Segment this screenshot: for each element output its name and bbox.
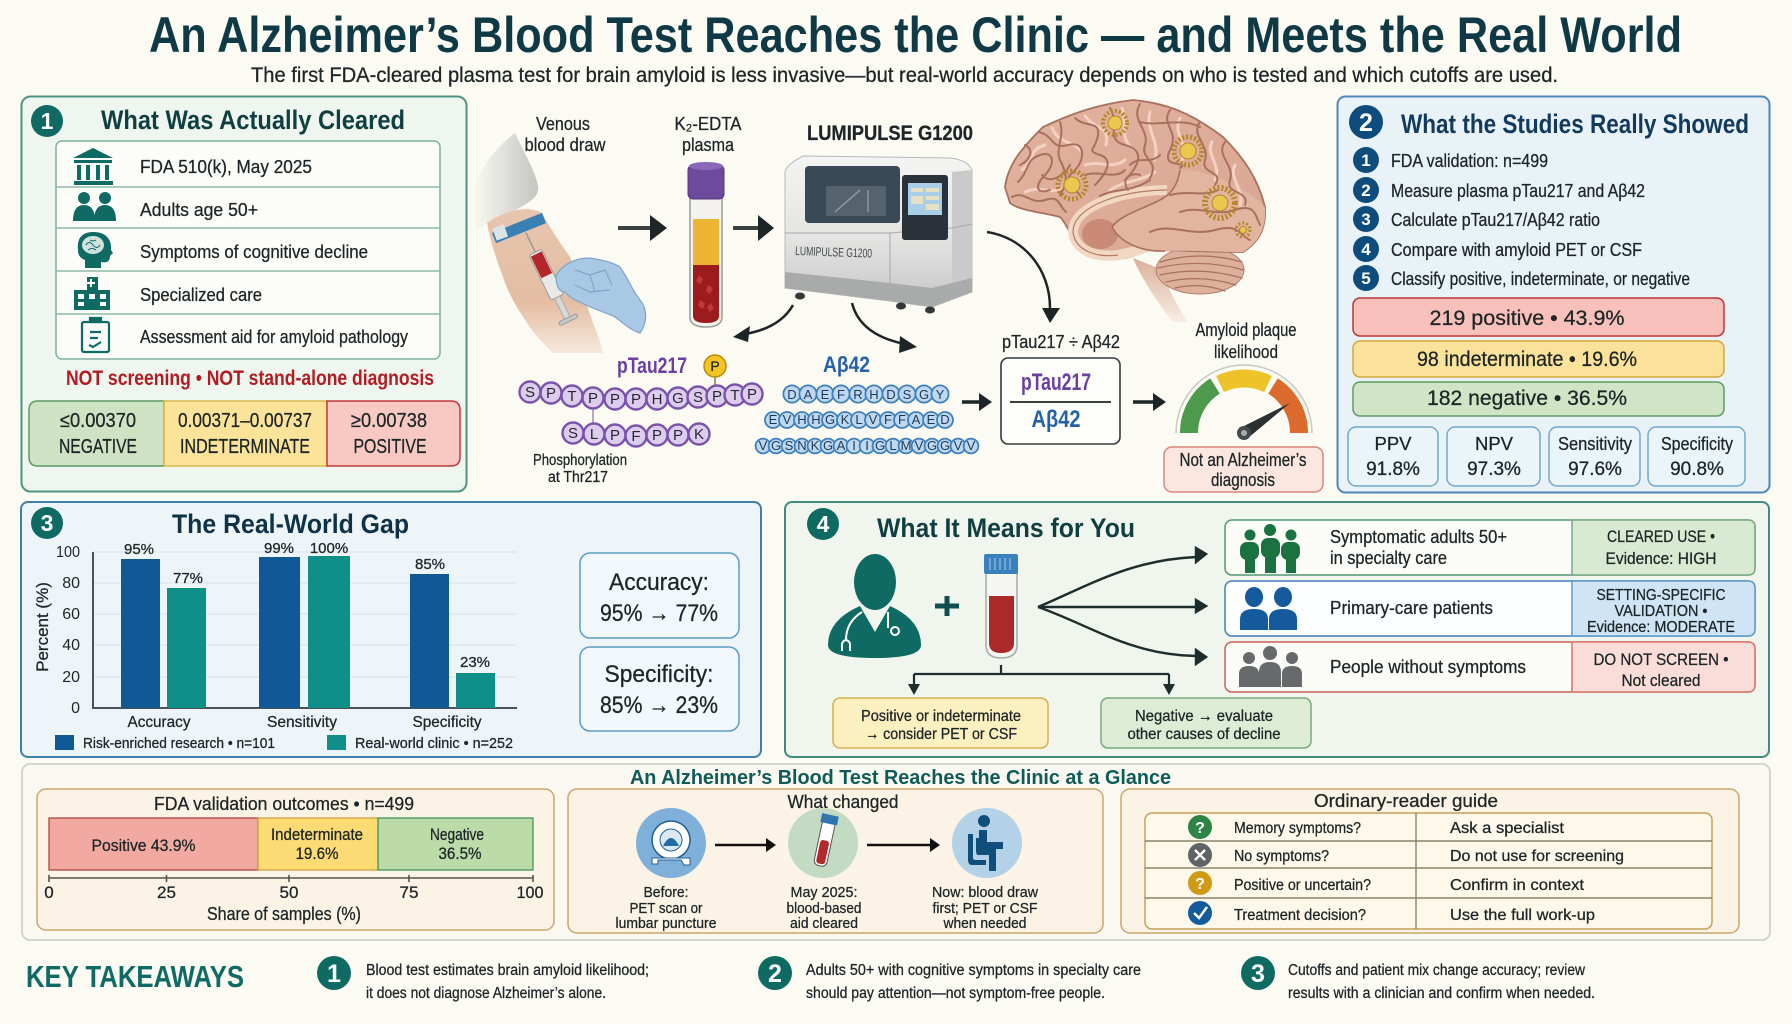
stacked outcomes chart: 19.6%: [296, 845, 339, 863]
result: negative: 182 negative • 36.5%: [1427, 387, 1627, 410]
forearm: [487, 209, 603, 353]
takeaway 2: Adults 50+ with cognitive symptoms in specialty care: [806, 962, 1141, 979]
stacked outcomes chart: FDA validation outcomes • n=499: [154, 793, 414, 814]
timeline labels: aid cleared: [790, 915, 858, 932]
callout: accuracy: Accuracy:: [609, 569, 709, 596]
row: people without symptoms: [1225, 642, 1755, 692]
takeaway 2: [758, 956, 1141, 1002]
text: symptoms: Symptoms of cognitive decline: [140, 241, 368, 262]
ordinary-reader guide: Treatment decision?: [1234, 907, 1366, 924]
arrow: analyzer to pTau217: [733, 305, 793, 342]
callout: specificity: Specificity:: [604, 661, 714, 688]
bar chart: 95%: [124, 541, 154, 558]
timeline labels: lumbar puncture: [616, 915, 716, 932]
legend: Risk-enriched research • n=101: [83, 736, 275, 752]
label: venous blood draw: [524, 113, 606, 155]
result: negative: [1353, 382, 1724, 416]
row: symptomatic adults: Symptomatic adults 50+: [1330, 527, 1507, 547]
row: primary-care patients: Evidence: MODERATE: [1587, 619, 1735, 636]
Aβ42 peptide chain: G: [875, 438, 885, 453]
Aβ42 peptide chain: K: [811, 438, 820, 453]
phosphate marker: P: [710, 358, 720, 374]
gauge label: Amyloid plaque: [1196, 320, 1296, 340]
arrow: tube to analyzer: [733, 215, 774, 241]
callout: accuracy: [580, 553, 739, 638]
icon: question amber: [1188, 871, 1212, 895]
row: people without symptoms: Not cleared: [1622, 671, 1700, 690]
callout: accuracy: 95% → 77%: [600, 600, 718, 627]
metric: specificity: [1648, 427, 1745, 486]
numbered steps: 2: [1361, 181, 1371, 200]
timeline labels: when needed: [943, 915, 1026, 932]
stacked outcomes chart: 36.5%: [438, 845, 482, 863]
numbered steps: [1353, 147, 1690, 291]
row: people without symptoms: DO NOT SCREEN •: [1594, 650, 1729, 669]
bar chart: 100: [56, 544, 80, 561]
glove: [556, 258, 646, 333]
illustration: LUMIPULSE G1200 analyzer: LUMIPULSE G1200: [795, 244, 872, 261]
timeline labels: Now: blood draw: [932, 884, 1038, 901]
cleared-use table: [56, 141, 440, 359]
Aβ42 peptide chain: L: [889, 438, 897, 453]
metric: NPV: [1447, 427, 1540, 486]
share axis: 50: [280, 883, 298, 902]
illustration: K2-EDTA plasma tube: K₂-EDTA: [674, 113, 742, 134]
callout: specificity: 85% → 23%: [600, 692, 718, 719]
bar chart: 100%: [310, 540, 348, 557]
gauge label: [1196, 320, 1296, 362]
Aβ42 peptide chain: G: [825, 412, 835, 427]
numbered steps: Compare with amyloid PET or CSF: [1391, 240, 1642, 260]
Aβ42 peptide chain: V: [967, 438, 976, 453]
illustration: K2-EDTA plasma tube: plasma: [682, 134, 735, 155]
fan arrows: [1038, 548, 1206, 664]
icon: question amber: ?: [1195, 876, 1205, 893]
glance band: [22, 764, 1770, 940]
takeaway 3: [1241, 956, 1595, 1002]
bar chart: 77%: [173, 570, 203, 587]
Aβ42 peptide chain: R: [853, 387, 863, 402]
row: primary-care patients: Primary-care patients: [1330, 598, 1493, 618]
Aβ42 peptide chain: G: [927, 438, 937, 453]
metric: PPV: 91.8%: [1366, 459, 1420, 480]
pTau217 peptide chain: P: [747, 386, 757, 403]
stacked outcomes chart: Negative: [430, 826, 484, 844]
bar chart: 85%: [415, 556, 445, 573]
phosphorylation label: at Thr217: [548, 469, 608, 486]
text: assessment aid: Assessment aid for amyloid pathology: [140, 326, 409, 347]
metric: NPV: NPV: [1475, 433, 1514, 454]
row: primary-care patients: [1225, 581, 1755, 636]
ratio label: pTau217 ÷ Aβ42: [1002, 332, 1120, 352]
phosphorylation label: Phosphorylation: [533, 452, 627, 469]
icon: head with brain: [78, 232, 113, 268]
arrow: ratio to gauge: [1133, 393, 1166, 411]
icon: three green people: [1240, 524, 1300, 573]
takeaway 1: [317, 956, 649, 1002]
takeaway 1: Blood test estimates brain amyloid likelihood;: [366, 962, 649, 979]
row: people without symptoms: People without symptoms: [1330, 657, 1526, 677]
pTau217 peptide chain: L: [590, 426, 598, 443]
ratio fraction box: [1001, 358, 1120, 444]
takeaway 2: should pay attention—not symptom-free people.: [806, 985, 1105, 1002]
row: symptomatic adults: Evidence: HIGH: [1606, 549, 1716, 568]
label: venous blood draw: blood draw: [524, 134, 606, 155]
illustration: brain with amyloid plaques: [1005, 100, 1265, 322]
takeaway 1: 1: [327, 960, 341, 988]
Aβ42 peptide chain: S: [785, 438, 794, 453]
pTau217 peptide chain: S: [525, 384, 535, 401]
number badge 4: 4: [817, 511, 830, 537]
Aβ42 peptide chain: S: [903, 387, 912, 402]
numbered steps: Classify positive, indeterminate, or negative: [1391, 269, 1690, 289]
pTau217 peptide chain: [520, 353, 762, 486]
pTau217 peptide chain: G: [672, 390, 684, 407]
Aβ42 peptide chain: N: [797, 438, 807, 453]
threshold strip: ≤0.00370: [60, 410, 136, 432]
share axis: 25: [157, 883, 176, 902]
number badge 3: [31, 507, 63, 539]
Aβ42 peptide chain: G: [940, 438, 950, 453]
icon: question green: ?: [1195, 820, 1205, 837]
arrow: peptides to ratio: [962, 393, 992, 411]
Aβ42 peptide chain: V: [759, 438, 768, 453]
takeaway 1: it does not diagnose Alzheimer’s alone.: [366, 985, 606, 1002]
caution: not a diagnosis: diagnosis: [1211, 470, 1275, 490]
ordinary-reader guide: No symptoms?: [1234, 848, 1329, 865]
arrow: analyzer to Aβ42: [852, 303, 917, 353]
metric: PPV: PPV: [1374, 433, 1412, 454]
text: FDA clearance: FDA 510(k), May 2025: [140, 156, 312, 177]
illustration: LUMIPULSE G1200 analyzer: [785, 122, 973, 314]
timeline labels: Before:: [644, 884, 688, 901]
Aβ42 peptide chain: [756, 352, 978, 453]
pTau217 peptide chain: P: [588, 390, 598, 407]
next step: negative: other causes of decline: [1128, 726, 1281, 743]
pTau217 peptide chain: P: [610, 391, 620, 408]
temporal lobe: [1112, 170, 1265, 252]
icon: check blue: [1188, 901, 1212, 925]
phosphate marker: [704, 355, 726, 396]
ordinary-reader guide: [1121, 789, 1739, 933]
Aβ42 peptide chain: F: [884, 412, 892, 427]
heading: What It Means for You: [877, 513, 1135, 543]
pTau217 peptide chain: S: [568, 425, 578, 442]
legend: Real-world clinic • n=252: [355, 736, 513, 752]
panel 4: what it means for you: [785, 502, 1769, 757]
ordinary-reader guide: Use the full work-up: [1450, 907, 1595, 924]
number badge 1: [31, 105, 63, 137]
row: symptomatic adults: [1225, 520, 1755, 575]
Aβ42 peptide chain: I: [852, 438, 856, 453]
threshold strip: NEGATIVE: [59, 436, 137, 458]
icon: PET scanner: [636, 808, 706, 878]
number badge 2: [1349, 105, 1383, 139]
Aβ42 peptide chain: A: [804, 387, 813, 402]
sleeve: [473, 133, 538, 232]
Aβ42 peptide chain: D: [787, 387, 797, 402]
likelihood gauge: [1176, 365, 1312, 440]
next step: positive or indeterminate: → consider PET or CSF: [865, 726, 1017, 743]
bar chart: 0: [71, 700, 80, 717]
bar chart: Accuracy: [128, 714, 190, 731]
stacked outcomes chart: Indeterminate: [271, 826, 363, 844]
phosphorylation label: [533, 452, 627, 486]
timeline labels: May 2025:: [790, 884, 858, 901]
what changed timeline: [568, 789, 1103, 933]
subtitle: The first FDA-cleared plasma test for brain amyloid is less invasive—but real-world accuracy depends on who is tested and which cutoffs are used.: [251, 64, 1558, 87]
Aβ42 peptide chain: H: [869, 387, 879, 402]
metric: specificity: 90.8%: [1670, 459, 1724, 480]
number badge 2: 2: [1359, 109, 1373, 137]
takeaway 2: 2: [768, 960, 782, 988]
panel 2: what the studies really showed: [1338, 96, 1770, 492]
Aβ42 peptide chain: V: [915, 438, 924, 453]
numbered steps: Calculate pTau217/Aβ42 ratio: [1391, 210, 1600, 230]
share axis: 75: [400, 883, 418, 902]
bar chart: [33, 540, 517, 731]
arrow: before to May 2025: [715, 838, 776, 852]
result: indeterminate: [1353, 341, 1724, 377]
timeline labels: first; PET or CSF: [932, 900, 1038, 917]
Aβ42 peptide chain: E: [927, 412, 936, 427]
metric: sensitivity: 97.6%: [1568, 459, 1622, 480]
pTau217 peptide chain: P: [652, 427, 662, 444]
warning line: NOT screening • NOT stand-alone diagnosis: [66, 367, 434, 390]
stacked outcomes chart: Positive 43.9%: [92, 836, 196, 855]
threshold strip: [29, 401, 460, 466]
threshold strip: POSITIVE: [354, 436, 426, 458]
ordinary-reader guide: Memory symptoms?: [1234, 820, 1361, 837]
numbered steps: 1: [1361, 151, 1371, 170]
Aβ42 peptide chain: A: [912, 412, 921, 427]
share axis: [44, 875, 544, 924]
row: symptomatic adults: in specialty care: [1330, 548, 1447, 568]
panel 3: the real-world gap: [21, 502, 761, 757]
Aβ42 peptide chain: F: [837, 387, 845, 402]
row: symptomatic adults: CLEARED USE •: [1607, 527, 1715, 546]
number badge 3: 3: [41, 510, 53, 536]
Aβ42 peptide chain: D: [886, 387, 896, 402]
illustration: venous blood draw: [473, 113, 646, 353]
Aβ42 peptide chain: G: [919, 387, 929, 402]
heading: What Was Actually Cleared: [101, 105, 405, 135]
stacked outcomes chart: [37, 789, 554, 930]
bar chart: 23%: [460, 654, 490, 671]
ratio fraction box: pTau217: [1021, 369, 1091, 396]
Aβ42 peptide chain: G: [771, 438, 781, 453]
ratio fraction box: Aβ42: [1032, 406, 1080, 433]
limbic arc: [1073, 190, 1167, 256]
bar chart: 40: [62, 637, 80, 654]
next step: positive or indeterminate: Positive or indeterminate: [861, 708, 1021, 725]
what changed timeline: What changed: [788, 792, 898, 812]
ordinary-reader guide: Ask a specialist: [1450, 820, 1565, 837]
Aβ42 peptide chain: L: [855, 412, 863, 427]
Aβ42 peptide chain: V: [954, 438, 963, 453]
numbered steps: Measure plasma pTau217 and Aβ42: [1391, 181, 1645, 201]
metric: specificity: Specificity: [1661, 433, 1734, 454]
Aβ42 peptide chain: F: [898, 412, 906, 427]
bar chart: 20: [62, 669, 80, 686]
cortical fold highlights: [1022, 108, 1241, 205]
icon: adults: [73, 192, 116, 221]
gauge label: likelihood: [1214, 342, 1278, 362]
next step: negative: Negative → evaluate: [1135, 708, 1273, 725]
pTau217 peptide chain: K: [694, 426, 704, 443]
icon: blood tube: [984, 554, 1018, 658]
Aβ42 peptide chain: Aβ42: [823, 352, 870, 377]
next step: positive or indeterminate: [833, 698, 1048, 748]
numbered steps: 4: [1361, 240, 1371, 259]
pTau217 peptide chain: P: [631, 391, 641, 408]
number badge 1: 1: [41, 108, 54, 134]
text: specialized care: Specialized care: [140, 284, 262, 305]
icon: three gray people: [1239, 646, 1302, 687]
Aβ42 peptide chain: G: [823, 438, 833, 453]
numbered steps: 5: [1361, 269, 1371, 288]
Aβ42 peptide chain: I: [865, 438, 869, 453]
number badge 4: [807, 508, 839, 540]
amyloid plaques: [1058, 111, 1250, 237]
panel 1: what was actually cleared: [22, 96, 466, 492]
pTau217 peptide chain: pTau217: [617, 353, 687, 378]
label: venous blood draw: Venous: [536, 113, 590, 134]
caution: not a diagnosis: Not an Alzheimer’s: [1180, 450, 1306, 470]
callout: specificity: [580, 647, 739, 731]
Aβ42 peptide chain: V: [783, 412, 792, 427]
syringe: [517, 228, 578, 326]
share axis: 0: [44, 883, 54, 902]
caution: not a diagnosis: [1164, 447, 1323, 492]
takeaway 3: results with a clinician and confirm when needed.: [1288, 985, 1595, 1002]
band title: An Alzheimer’s Blood Test Reaches the Clinic at a Glance: [630, 767, 1171, 789]
pTau217 peptide chain: P: [546, 385, 556, 402]
takeaway 3: Cutoffs and patient mix change accuracy; review: [1288, 962, 1586, 979]
bar chart: Sensitivity: [267, 714, 337, 731]
icon: question green: [1188, 815, 1212, 839]
next step: negative: [1101, 698, 1311, 748]
share axis: Share of samples (%): [207, 904, 361, 924]
pTau217 peptide chain: T: [730, 387, 740, 404]
Aβ42 peptide chain: Y: [936, 387, 945, 402]
arrow: analyzer to ratio: [987, 232, 1060, 323]
cerebrum: [1005, 100, 1265, 259]
legend: [55, 735, 513, 752]
row: primary-care patients: SETTING-SPECIFIC: [1596, 587, 1726, 604]
icon: cross gray: [1188, 843, 1212, 867]
metric: sensitivity: [1549, 427, 1640, 486]
text: adults: Adults age 50+: [140, 199, 258, 220]
share axis: 100: [516, 883, 544, 902]
Aβ42 peptide chain: E: [821, 387, 830, 402]
timeline labels: PET scan or: [630, 900, 702, 917]
threshold strip: INDETERMINATE: [180, 436, 310, 458]
threshold strip: ≥0.00738: [351, 410, 427, 432]
Aβ42 peptide chain: H: [811, 412, 821, 427]
heading: The Real-World Gap: [172, 509, 409, 539]
icon: institution: [73, 148, 113, 185]
icon: clinician: [828, 554, 921, 658]
arrow: draw to tube: [618, 215, 667, 241]
metric: PPV: [1348, 427, 1438, 486]
result branch connector: [908, 665, 1175, 695]
Aβ42 peptide chain: A: [837, 438, 846, 453]
icon: two blue people: [1240, 587, 1297, 630]
Aβ42 peptide chain: V: [869, 412, 878, 427]
bar chart: 60: [62, 606, 80, 623]
bar chart: 80: [62, 575, 80, 592]
row: primary-care patients: VALIDATION •: [1614, 603, 1708, 620]
icon: cleared tube: [788, 808, 858, 878]
arrow: May 2025 to now: [867, 838, 940, 852]
pTau217 peptide chain: P: [673, 427, 683, 444]
numbered steps: FDA validation: n=499: [1391, 151, 1548, 171]
Aβ42 peptide chain: H: [797, 412, 807, 427]
ordinary-reader guide: Ordinary-reader guide: [1314, 791, 1498, 811]
result: positive: [1353, 298, 1724, 336]
result: indeterminate: 98 indeterminate • 19.6%: [1417, 348, 1637, 371]
threshold strip: 0.00371–0.00737: [178, 410, 312, 432]
plus sign: [935, 596, 959, 616]
timeline labels: [616, 884, 1038, 932]
bar chart: 99%: [264, 540, 294, 557]
illustration: K2-EDTA plasma tube: [674, 113, 742, 327]
bar chart: Specificity: [412, 714, 482, 731]
pTau217 peptide chain: S: [693, 389, 703, 406]
pTau217 peptide chain: P: [712, 388, 722, 405]
key takeaways heading: KEY TAKEAWAYS: [26, 959, 244, 994]
result: positive: 219 positive • 43.9%: [1430, 307, 1624, 330]
ordinary-reader guide: Positive or uncertain?: [1234, 877, 1371, 894]
pTau217 peptide chain: F: [631, 428, 641, 445]
icon: seated patient: [952, 808, 1022, 878]
pTau217 peptide chain: H: [652, 391, 662, 408]
timeline labels: blood-based: [786, 900, 862, 917]
inner limbic region: [1082, 219, 1118, 249]
Aβ42 peptide chain: D: [940, 412, 950, 427]
cortical folds: [1012, 104, 1260, 240]
pTau217 peptide chain: T: [567, 388, 577, 405]
takeaway 3: 3: [1251, 960, 1265, 988]
pTau217 peptide chain: P: [610, 427, 620, 444]
Aβ42 peptide chain: K: [841, 412, 850, 427]
axis label: Percent (%): [33, 582, 52, 672]
illustration: LUMIPULSE G1200 analyzer: LUMIPULSE G1200: [807, 122, 973, 145]
cerebellum: [1156, 246, 1244, 294]
brain stem: [1133, 258, 1187, 322]
numbered steps: 3: [1361, 210, 1371, 229]
metric: sensitivity: Sensitivity: [1558, 433, 1633, 454]
Aβ42 peptide chain: M: [901, 438, 911, 453]
Aβ42 peptide chain: E: [769, 412, 778, 427]
metric: NPV: 97.3%: [1467, 459, 1521, 480]
ordinary-reader guide: Confirm in context: [1450, 877, 1585, 894]
icon: hospital: [74, 277, 110, 310]
ordinary-reader guide: Do not use for screening: [1450, 848, 1624, 865]
icon: clipboard: [82, 318, 109, 352]
